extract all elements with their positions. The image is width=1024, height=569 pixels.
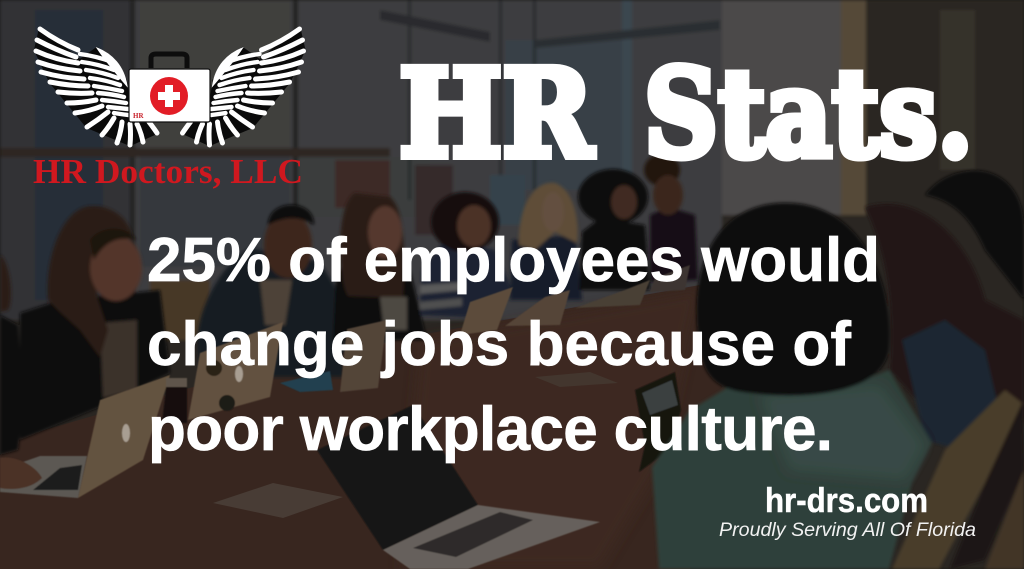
top right person xyxy=(925,170,1024,300)
title word HR: HR xyxy=(399,42,594,185)
coffee cup xyxy=(162,378,187,423)
tablet xyxy=(340,320,387,392)
red cross circle xyxy=(150,77,188,115)
left laptop base xyxy=(0,456,87,498)
wing arm xyxy=(97,48,127,86)
laptop 3 xyxy=(460,287,513,335)
company name: HR Doctors, LLC xyxy=(33,152,303,191)
line 2: change jobs because of xyxy=(147,310,851,379)
woman in striped top xyxy=(420,240,512,317)
logo: HR Doctors, LLC xyxy=(33,28,304,191)
foreground people xyxy=(652,170,1024,569)
far-left person xyxy=(0,315,24,455)
white cross xyxy=(158,85,180,107)
logo wings xyxy=(35,28,304,145)
title: HR Stats. xyxy=(399,42,973,185)
meeting participants xyxy=(0,154,698,455)
case handle xyxy=(151,54,187,68)
laptops on table xyxy=(0,265,690,569)
woman with glasses xyxy=(333,257,427,340)
tagline: Proudly Serving All Of Florida xyxy=(719,520,976,541)
far paper on table xyxy=(535,372,618,387)
woman with curly hair xyxy=(20,290,170,440)
left wing xyxy=(35,28,157,145)
denim jacket xyxy=(902,320,999,450)
left laptop lid xyxy=(78,375,170,498)
teal shirt xyxy=(652,370,932,569)
big dark hair xyxy=(697,203,890,396)
conference table xyxy=(0,285,745,569)
case body xyxy=(129,69,210,122)
front laptop keyboard xyxy=(413,512,533,557)
right wing xyxy=(182,28,304,145)
blonde woman xyxy=(510,235,582,300)
case label: HR xyxy=(133,112,144,120)
medical case xyxy=(129,54,210,122)
left laptop keyboard xyxy=(33,465,82,490)
teal book xyxy=(280,371,333,392)
right chair rear xyxy=(985,470,1024,569)
front laptop screen xyxy=(317,405,478,550)
phone on table xyxy=(635,372,681,472)
front laptop base xyxy=(383,505,600,569)
apple logo xyxy=(122,424,130,442)
paper on table xyxy=(213,483,343,518)
line 3: poor workplace culture. xyxy=(148,395,833,464)
background right person hair xyxy=(865,204,1024,450)
hand xyxy=(0,457,42,489)
main statistic text xyxy=(147,226,880,464)
man in navy jacket xyxy=(197,248,343,377)
website address: hr-drs.com xyxy=(765,482,928,520)
right chair arm xyxy=(892,390,1022,569)
woman with dark curly hair xyxy=(579,218,650,290)
woman with hair bun xyxy=(650,207,698,282)
second laptop xyxy=(188,322,283,420)
title word Stats.: Stats. xyxy=(644,42,973,185)
line 1: 25% of employees would xyxy=(147,226,880,295)
